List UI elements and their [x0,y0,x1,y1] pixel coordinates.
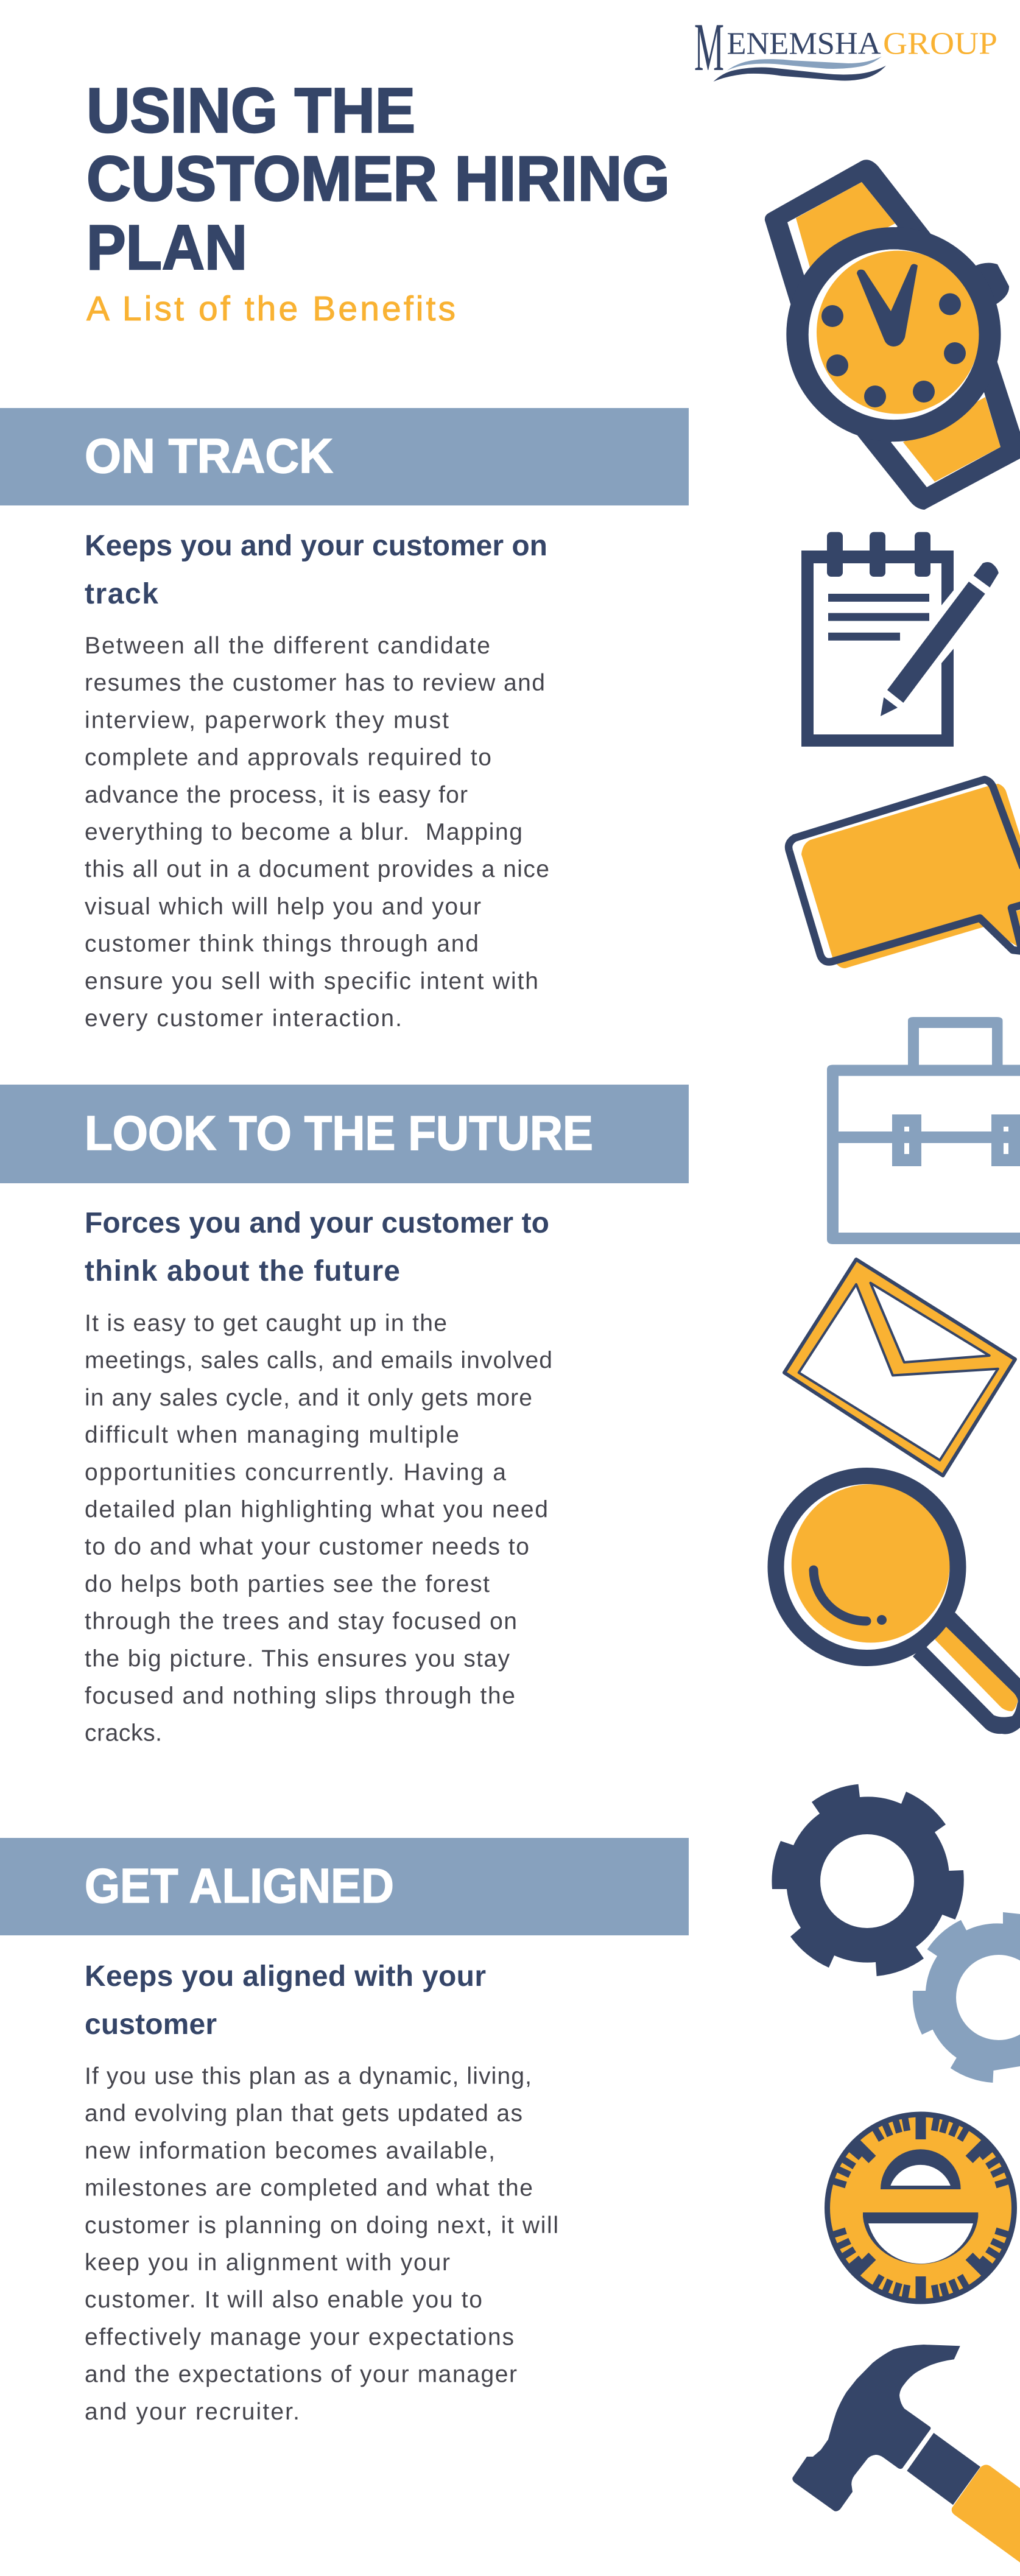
text block: look to the future: do helps both parties see the forest [85,1571,490,1597]
logo: Menemsha Group [694,10,997,85]
logo: Menemsha Group: ENEMSHA [727,27,881,61]
heading: look to the future: Forces you and your customer to [85,1207,549,1239]
heading: get aligned [85,1960,486,2041]
icon: large gear [772,1784,964,1976]
text block: get aligned: customer is planning on doing next, it will [85,2212,558,2239]
text block: on track: this all out in a document provides a nice [85,856,549,882]
text block: on track: Between all the different candidate [85,633,490,659]
text block: on track: advance the process, it is easy for [85,782,468,808]
icon: magnifying glass [776,1476,1020,1734]
icon: envelope [784,1259,1015,1476]
icon: wristwatch [765,160,1020,510]
text block: get aligned: effectively manage your expectations [85,2324,514,2350]
text block: get aligned [85,2063,558,2425]
heading: get aligned: customer [85,2008,217,2041]
text block: on track: complete and approvals required to [85,745,491,771]
panel: get aligned banner [0,1838,689,1935]
text block: on track: customer think things through and [85,931,479,957]
title [86,76,670,283]
icon: briefcase [827,1017,1020,1244]
heading: on track [85,530,547,610]
text block: look to the future: cracks. [85,1720,162,1747]
icon: speech bubble [789,779,1020,968]
text block: get aligned: new information becomes available, [85,2138,495,2164]
icon: small gear [913,1912,1020,2083]
panel: on track banner [0,408,689,505]
text block: look to the future: to do and what your customer needs to [85,1534,529,1560]
text block: on track: interview, paperwork they must [85,707,449,733]
text block: get aligned: and evolving plan that gets updated as [85,2100,522,2127]
title: USING THE [86,76,415,146]
icon: notepad and pencil [801,532,999,747]
logo: Menemsha Group: M [694,10,724,85]
subtitle: A List of the Benefits [86,289,455,328]
text block: look to the future: through the trees and stay focused on [85,1608,517,1635]
text block: on track: everything to become a blur. Mapping [85,819,522,845]
panel: look to the future banner: LOOK TO THE FUTURE [85,1106,593,1160]
text block: look to the future: in any sales cycle, and it only gets more [85,1385,532,1411]
text block: look to the future: difficult when managing multiple [85,1422,459,1448]
text block: get aligned: keep you in alignment with your [85,2250,450,2276]
text block: get aligned: and the expectations of your manager [85,2362,517,2388]
text block: look to the future: focused and nothing slips through the [85,1683,515,1709]
title: CUSTOMER HIRING [86,144,670,214]
text block: get aligned: If you use this plan as a dynamic, living, [85,2063,532,2089]
heading: on track: track [85,578,158,610]
icon: protractor dial [825,2112,1017,2304]
panel: on track banner: ON TRACK [85,429,333,483]
text block: get aligned: and your recruiter. [85,2399,300,2425]
text block: look to the future [85,1311,552,1747]
text block: look to the future: It is easy to get caught up in the [85,1311,447,1336]
text block: on track [85,633,549,1032]
text block: get aligned: milestones are completed and what the [85,2175,533,2201]
heading: look to the future [85,1207,549,1287]
text block: on track: every customer interaction. [85,1005,402,1032]
icon: hammer [792,2345,1020,2563]
heading: get aligned: Keeps you aligned with your [85,1960,486,1993]
logo: Menemsha Group: GROUP [883,27,997,61]
text block: look to the future: the big picture. This ensures you stay [85,1645,510,1672]
text block: on track: visual which will help you and your [85,893,481,920]
text block: on track: resumes the customer has to review and [85,670,545,696]
heading: on track: Keeps you and your customer on [85,530,547,562]
heading: look to the future: think about the future [85,1255,400,1287]
text block: look to the future: detailed plan highlighting what you need [85,1497,548,1522]
title: PLAN [86,213,247,283]
panel: get aligned banner: GET ALIGNED [85,1859,394,1913]
panel: look to the future banner [0,1085,689,1183]
text block: look to the future: opportunities concurrently. Having a [85,1459,506,1485]
text block: look to the future: meetings, sales calls, and emails involved [85,1348,552,1374]
text block: get aligned: customer. It will also enable you to [85,2287,482,2313]
text block: on track: ensure you sell with specific intent with [85,968,538,994]
